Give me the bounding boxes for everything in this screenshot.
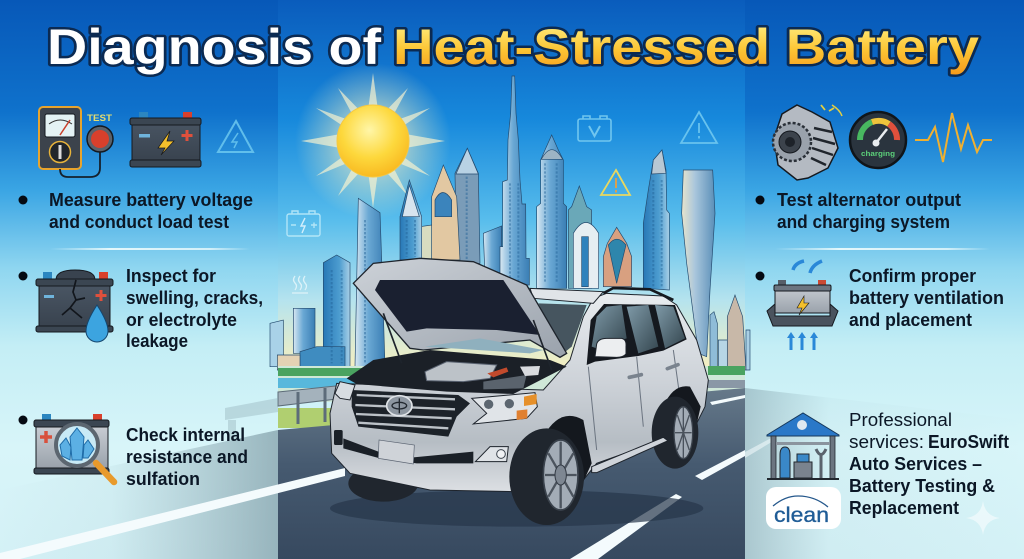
- icon: ventilated battery in tray: [767, 261, 838, 350]
- grille: [352, 390, 470, 437]
- line icon: warning triangle: [681, 112, 717, 143]
- door lines: [588, 350, 682, 450]
- icon: waveform: [915, 113, 992, 162]
- bullet and text: alternator: and charging system: [777, 211, 950, 232]
- text: professional services: Battery Testing &: [849, 475, 995, 496]
- front door window: [592, 305, 627, 348]
- text: professional services: EuroSwift: [928, 431, 1009, 452]
- windshield: [538, 303, 587, 353]
- bullet and text: check resistance: [18, 416, 248, 489]
- title: Heat-Stressed Battery: [393, 19, 979, 75]
- icon: test button: [60, 113, 113, 177]
- car body: [330, 293, 708, 492]
- bullet and text: measure voltage: Measure battery voltage: [49, 189, 253, 210]
- icon: charging gauge: charging: [861, 149, 895, 158]
- text: professional services: [849, 409, 1009, 518]
- rear wheel: [652, 386, 701, 469]
- bullet and text: check resistance: sulfation: [126, 468, 200, 489]
- bullet and text: ventilation: and placement: [849, 309, 972, 330]
- bullet and text: measure voltage: [18, 189, 253, 232]
- front wheel: [509, 428, 584, 525]
- bullet and text: inspect: Inspect for: [126, 265, 216, 286]
- icon: warning bolt outline: [218, 121, 253, 152]
- licence plate: [378, 440, 414, 464]
- city skyline: [270, 76, 750, 370]
- title: Diagnosis of: [47, 19, 381, 75]
- window frames: [587, 304, 687, 365]
- title: [47, 19, 979, 75]
- bullet and text: alternator: [756, 189, 961, 232]
- open hood: [353, 258, 567, 357]
- car shadow: [330, 490, 703, 527]
- roof: [530, 288, 603, 303]
- hood underside: [375, 280, 540, 335]
- side mirror: [595, 338, 626, 357]
- left panel road fade: [0, 430, 278, 559]
- icon: multimeter: [39, 107, 81, 169]
- hood struts: [383, 313, 552, 370]
- bullet and text: ventilation: Confirm proper: [849, 265, 976, 286]
- icon: alternator: [773, 105, 842, 180]
- text: professional services: Replacement: [849, 497, 959, 518]
- text: professional services: services:: [849, 431, 924, 452]
- bullet and text: measure voltage: and conduct load test: [49, 211, 229, 232]
- bullet and text: ventilation: [756, 265, 1004, 330]
- logo: clean: [766, 487, 841, 529]
- line icon: yellow warning: [601, 170, 630, 195]
- roof rack: [603, 288, 673, 300]
- decorative sparkle: [966, 501, 1000, 535]
- bullet and text: inspect: leakage: [126, 330, 188, 351]
- bullet and text: alternator: Test alternator output: [777, 189, 961, 210]
- battery in bay: [483, 375, 527, 389]
- text: professional services: Auto Services –: [849, 453, 982, 474]
- icon: charging gauge: [850, 112, 906, 168]
- fog light: [475, 447, 508, 462]
- logo: clean: clean: [774, 504, 829, 527]
- engine cover: [425, 362, 497, 382]
- bullet and text: inspect: [18, 265, 263, 351]
- road lane markings: [0, 395, 775, 559]
- front wheel arch: [543, 416, 592, 482]
- door handles: [629, 365, 678, 377]
- line icon: voltage box: [578, 116, 611, 141]
- icon: battery and magnifier crystals: [34, 414, 114, 482]
- text: professional services: Professional: [849, 409, 952, 430]
- toyota emblem: [387, 396, 412, 416]
- lower intake: [343, 438, 473, 463]
- left small fog: [334, 430, 343, 445]
- sun: [295, 63, 451, 219]
- icon: cracked swollen battery: [36, 270, 113, 342]
- left headlight: [335, 382, 355, 400]
- icon: battery with bolt: [130, 112, 201, 167]
- engine bay: [347, 350, 567, 394]
- bullet and text: ventilation: battery ventilation: [849, 287, 1004, 308]
- right headlight: [472, 393, 537, 424]
- bullet and text: inspect: swelling, cracks,: [126, 287, 263, 308]
- line icon: battery outline: [287, 211, 320, 236]
- middle window: [627, 305, 658, 353]
- bullet and text: check resistance: Check internal: [126, 424, 245, 445]
- right panel road fade: [745, 388, 1024, 559]
- rear-left tyre: [348, 465, 418, 502]
- icon: service garage: [767, 413, 839, 480]
- windscreen reflection: [425, 338, 543, 353]
- coolant reservoir: [520, 366, 540, 376]
- bullet and text: check resistance: resistance and: [126, 446, 248, 467]
- SUV with open hood: [330, 258, 708, 527]
- running board: [592, 437, 668, 473]
- left panel guard rail: [225, 398, 278, 440]
- road and roadside: [278, 366, 745, 559]
- icon: test button: TEST: [87, 113, 112, 124]
- rear window: [655, 305, 685, 348]
- bullet and text: inspect: or electrolyte: [126, 309, 237, 330]
- line icon: heat waves: [292, 276, 308, 293]
